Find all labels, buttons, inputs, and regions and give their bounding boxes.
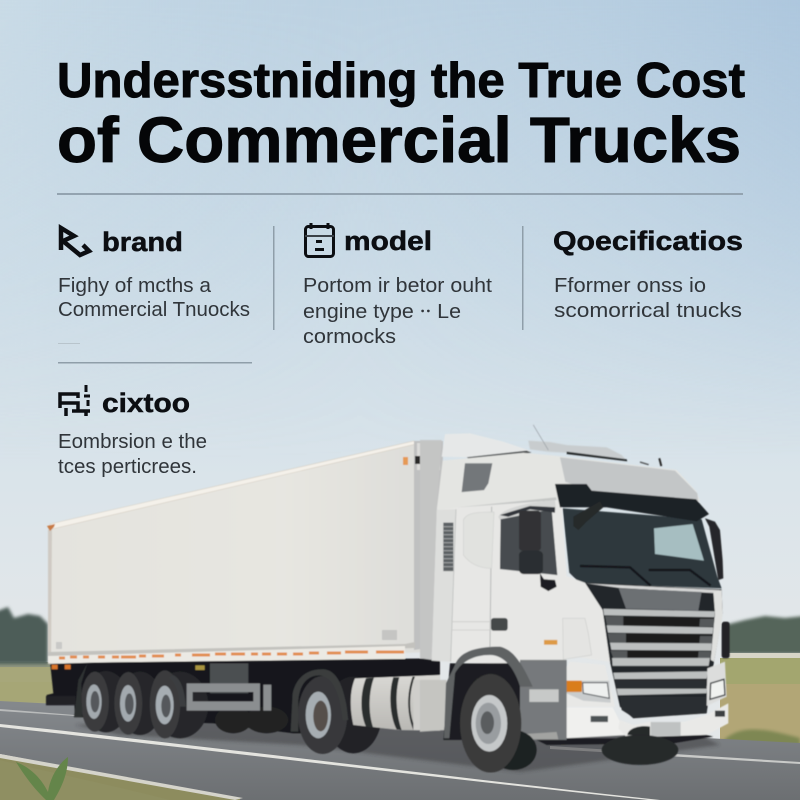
cab, drawn in 3x zoom coordinates: [420, 425, 730, 773]
icon: cixtoo: [60, 385, 90, 416]
icon: brand: [61, 228, 89, 255]
specifications description: [554, 275, 742, 322]
specifications description: Fformer onss io: [554, 275, 706, 297]
sun visor: [555, 484, 709, 521]
drive axle: [325, 677, 382, 753]
upper cab: [437, 453, 700, 510]
background tree lines and fields: [0, 607, 800, 746]
front corner panel: [563, 575, 611, 662]
reflector stripe: [59, 652, 404, 658]
model description: [303, 275, 492, 348]
cixtoo heading: cixtoo: [102, 388, 190, 418]
under-cab step and front wheel: [420, 647, 678, 773]
grass foreground with plant: [0, 757, 170, 800]
cixtoo description: Eombrsion e the: [58, 431, 207, 453]
cab door and side panels: [432, 500, 567, 666]
cixtoo description: tces perticrees.: [58, 456, 197, 478]
title: of Commercial Trucks: [57, 104, 741, 176]
panel: brand: [58, 227, 250, 321]
trailer box: [47, 441, 443, 664]
grille: [585, 583, 730, 718]
brand heading: brand: [102, 227, 183, 257]
model description: engine type ⸱⸱ Le: [303, 301, 461, 323]
panel: specifications: [553, 226, 743, 322]
wipers: [580, 566, 711, 586]
truck: [46, 425, 730, 773]
fuel tanks: [351, 675, 440, 731]
door window: [498, 500, 556, 520]
column dividers: [58, 226, 524, 364]
model description: Portom ir betor ouht: [303, 275, 492, 297]
brand description: Fighy of mcths a: [58, 275, 212, 297]
axle wheels: [81, 670, 288, 738]
road shadow under truck: [75, 710, 720, 772]
specifications heading: Qoecificatios: [553, 226, 743, 256]
cixtoo description: [58, 431, 207, 478]
bumper and headlights: [533, 662, 728, 745]
brand description: Commercial Tnuocks: [58, 299, 250, 321]
title: [57, 54, 745, 176]
side guard: [187, 683, 260, 711]
windshield: [563, 508, 722, 588]
title divider: [57, 193, 743, 195]
brand description: [58, 275, 250, 321]
model heading: model: [344, 226, 432, 256]
road: [0, 701, 800, 800]
specifications description: scomorrical tnucks: [554, 300, 742, 322]
panel: cixtoo: [58, 385, 207, 478]
panel: model: [303, 223, 492, 348]
spoiler: [442, 433, 530, 457]
model description: cormocks: [303, 326, 396, 348]
mudguards: [74, 663, 87, 717]
trailer chassis and wheels: [46, 658, 440, 754]
title: Undersstniding the True Cost: [57, 54, 745, 108]
side mirrors: [519, 501, 723, 591]
icon: model calendar: [305, 223, 334, 256]
